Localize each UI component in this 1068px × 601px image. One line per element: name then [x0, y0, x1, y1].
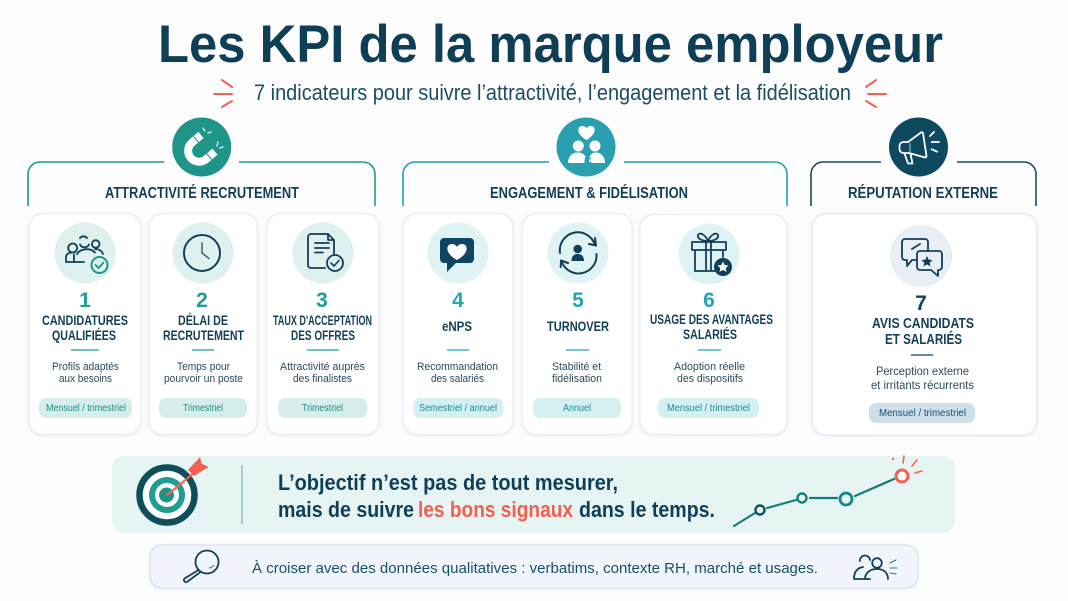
kpi name: AVIS CANDIDATS	[872, 316, 974, 332]
number: 1	[79, 289, 91, 312]
title: Les KPI de la marque employeur	[158, 15, 943, 74]
description: Recommandation	[417, 361, 498, 373]
kpi name: SALARIÉS	[683, 327, 737, 342]
icon: people with heart	[556, 118, 616, 176]
card 7: avis candidats et salariés	[812, 214, 1037, 435]
description: et irritants récurrents	[871, 378, 974, 392]
description: Attractivité auprès	[280, 361, 365, 373]
number: 4	[452, 289, 464, 312]
banner: objectif	[112, 456, 955, 533]
icon: speech bubble with heart	[428, 222, 488, 284]
frequency pill: Mensuel / trimestriel	[667, 402, 750, 414]
card 3: taux d'acceptation des offres	[266, 214, 380, 434]
section heading: ENGAGEMENT & FIDÉLISATION	[490, 183, 688, 202]
frequency pill	[413, 398, 503, 418]
number: 3	[316, 289, 328, 312]
description: des salariés	[431, 373, 484, 385]
description: Temps pour	[177, 361, 230, 373]
description: Stabilité et	[552, 361, 601, 373]
card 4: eNPS	[403, 214, 513, 434]
section header: attractivité recrutement	[28, 118, 375, 206]
icon: magnet	[172, 118, 231, 176]
description: Adoption réelle	[674, 361, 745, 373]
frequency pill	[869, 403, 975, 423]
icon: candidates with check	[54, 222, 116, 284]
frequency pill: Trimestriel	[302, 402, 343, 414]
kpi name: DÉLAI DE	[178, 313, 228, 328]
icon: review bubbles with star	[890, 225, 952, 287]
kpi name: ET SALARIÉS	[885, 331, 962, 348]
kpi name: TURNOVER	[547, 319, 609, 334]
number: 6	[703, 289, 715, 312]
icon: left coral rays	[214, 80, 232, 107]
frequency pill	[278, 398, 367, 418]
frequency pill	[159, 398, 247, 418]
description: Perception externe	[876, 364, 969, 378]
description: des finalistes	[293, 373, 352, 385]
icon: circular arrows with person	[548, 222, 608, 284]
kpi name: eNPS	[442, 319, 472, 334]
kpi name: RECRUTEMENT	[163, 328, 245, 343]
icon: magnifier	[184, 550, 218, 582]
key message: L’objectif n’est pas de tout mesurer,	[278, 470, 618, 495]
icon: megaphone	[889, 118, 948, 176]
section header: réputation externe	[811, 118, 1036, 206]
chart: rising signal line	[734, 456, 922, 526]
key message: dans le temps.	[579, 497, 715, 522]
number: 5	[572, 289, 584, 312]
section heading: RÉPUTATION EXTERNE	[848, 183, 998, 202]
icon: gift with star	[678, 224, 740, 284]
icon: document with check	[292, 222, 354, 284]
frequency pill	[658, 398, 759, 418]
kpi name: QUALIFIÉES	[52, 328, 116, 343]
description: des dispositifs	[677, 373, 743, 385]
description: fidélisation	[552, 373, 602, 385]
card 1: candidatures qualifiées	[29, 214, 141, 434]
card 5: turnover	[522, 214, 632, 434]
card 2: délai de recrutement	[148, 214, 258, 434]
frequency pill: Mensuel / trimestriel	[879, 407, 966, 419]
description: pourvoir un poste	[164, 373, 243, 385]
note text: À croiser avec des données qualitatives : verbatims, contexte RH, marché et usages.	[252, 560, 818, 577]
card 6: usage des avantages salariés	[640, 214, 787, 434]
section heading: ATTRACTIVITÉ RECRUTEMENT	[105, 183, 299, 202]
kpi name: USAGE DES AVANTAGES	[650, 312, 773, 327]
frequency pill: Trimestriel	[183, 402, 223, 414]
icon: clock	[172, 222, 234, 284]
key message: mais de suivre	[278, 497, 414, 522]
frequency pill: Annuel	[563, 402, 591, 414]
key message: les bons signaux	[418, 497, 574, 522]
description: Profils adaptés	[52, 361, 119, 373]
kpi name: TAUX D'ACCEPTATION	[273, 313, 372, 328]
kpi name: CANDIDATURES	[42, 313, 128, 328]
number: 2	[196, 289, 208, 312]
note bar: données qualitatives	[150, 545, 918, 588]
frequency pill	[39, 398, 132, 418]
description: aux besoins	[59, 373, 112, 385]
frequency pill: Semestriel / annuel	[419, 402, 497, 414]
icon: target with arrow	[140, 457, 208, 522]
number: 7	[915, 292, 927, 315]
icon: right coral rays	[866, 80, 886, 107]
section header: engagement et fidélisation	[403, 118, 787, 206]
frequency pill	[533, 398, 621, 418]
frequency pill: Mensuel / trimestriel	[46, 402, 126, 414]
kpi name: DES OFFRES	[291, 328, 355, 343]
subtitle: 7 indicateurs pour suivre l’attractivité, l’engagement et la fidélisation	[254, 80, 851, 105]
icon: people with signal	[854, 555, 897, 579]
